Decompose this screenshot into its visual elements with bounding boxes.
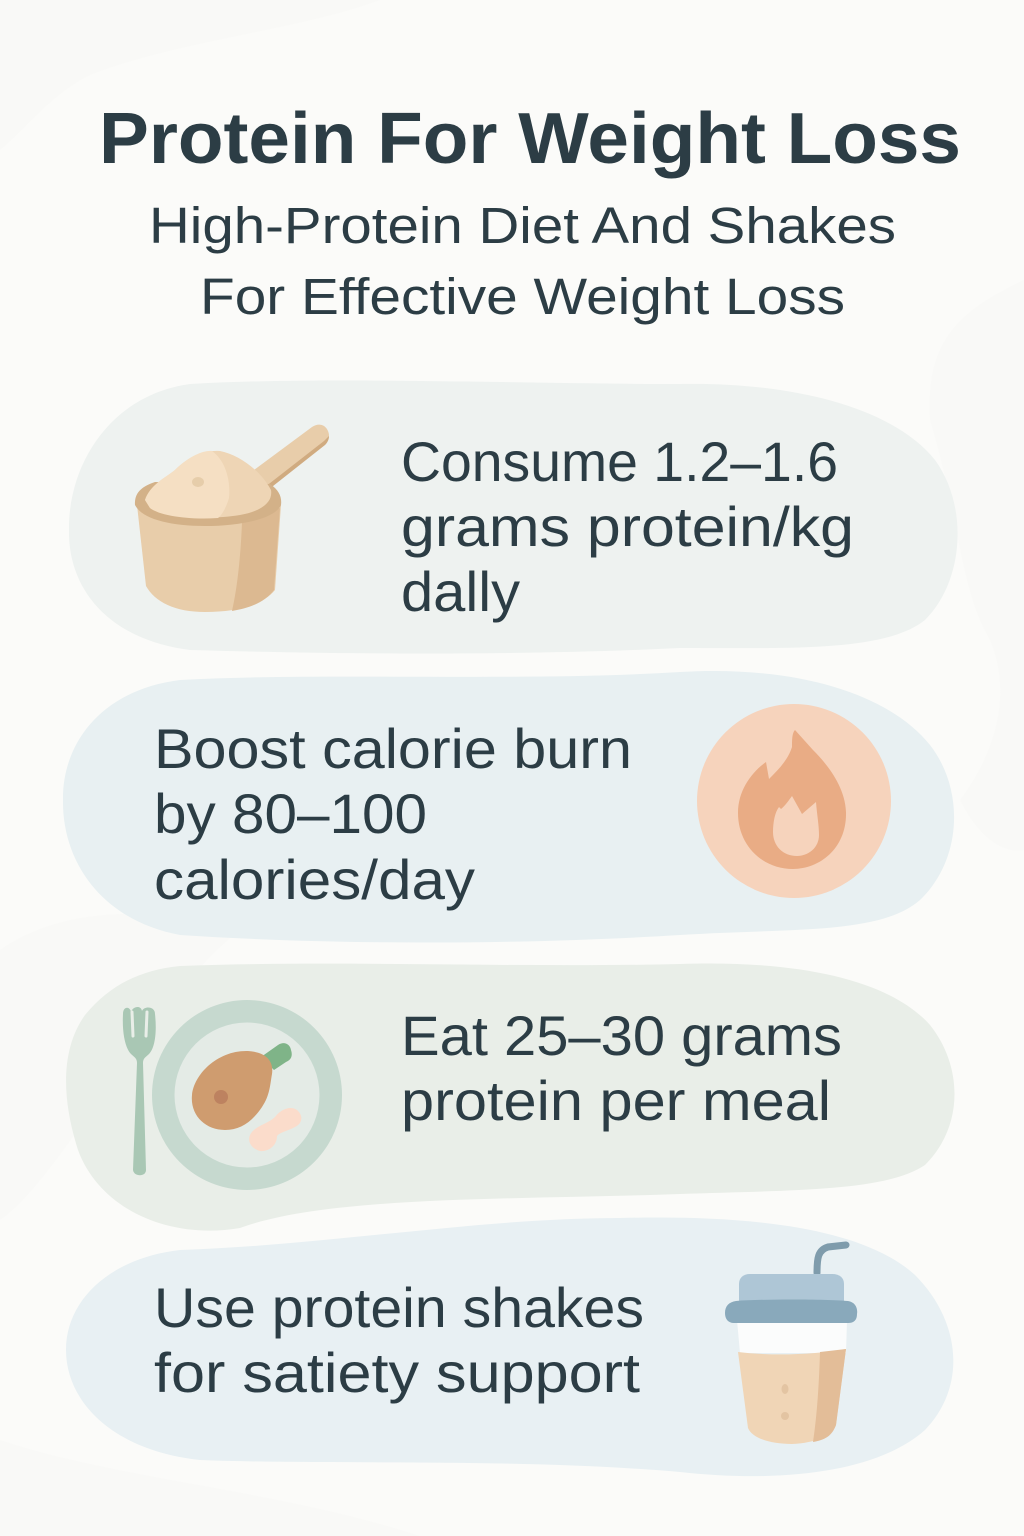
icon: flame	[697, 704, 891, 898]
text: daily protein target	[401, 430, 854, 623]
icon: side garnish	[249, 1108, 301, 1151]
text: shakes for satiety: Use protein shakes	[154, 1276, 644, 1339]
text: shakes for satiety	[154, 1276, 644, 1404]
text: calorie burn boost: calories/day	[154, 848, 475, 911]
text: calorie burn boost	[154, 717, 632, 911]
icon: fork and plate	[123, 1000, 342, 1190]
panel background	[69, 380, 958, 654]
icon: chicken bone	[261, 1043, 292, 1070]
icon: chicken drumstick	[192, 1051, 272, 1130]
subtitle: High-Protein Diet And Shakes	[149, 197, 896, 254]
text: calorie burn boost: by 80–100	[154, 782, 427, 845]
panel background	[66, 1218, 953, 1476]
text: per meal target: Eat 25–30 grams	[401, 1004, 842, 1067]
panel: protein intake	[69, 380, 958, 654]
subtitle: For Effective Weight Loss	[200, 268, 845, 325]
panel background	[66, 964, 955, 1231]
text: per meal target	[401, 1004, 842, 1132]
panel background	[63, 671, 954, 942]
icon: plate	[152, 1000, 342, 1190]
panel: calorie burn	[63, 671, 954, 942]
text: calorie burn boost: Boost calorie burn	[154, 717, 632, 780]
panel: protein shakes	[66, 1218, 953, 1476]
text: daily protein target: dally	[401, 560, 520, 623]
text: per meal target: protein per meal	[401, 1069, 831, 1132]
text: daily protein target: grams protein/kg	[401, 495, 854, 558]
icon: shake cup	[725, 1245, 857, 1444]
icon: straw	[817, 1245, 846, 1273]
icon: protein scoop	[135, 425, 329, 612]
text: daily protein target: Consume 1.2–1.6	[401, 430, 838, 493]
panel: protein per meal	[66, 964, 955, 1231]
subtitle	[149, 197, 896, 325]
title: Protein For Weight Loss	[99, 99, 961, 179]
text: shakes for satiety: for satiety support	[154, 1341, 640, 1404]
icon: fork	[123, 1007, 156, 1175]
